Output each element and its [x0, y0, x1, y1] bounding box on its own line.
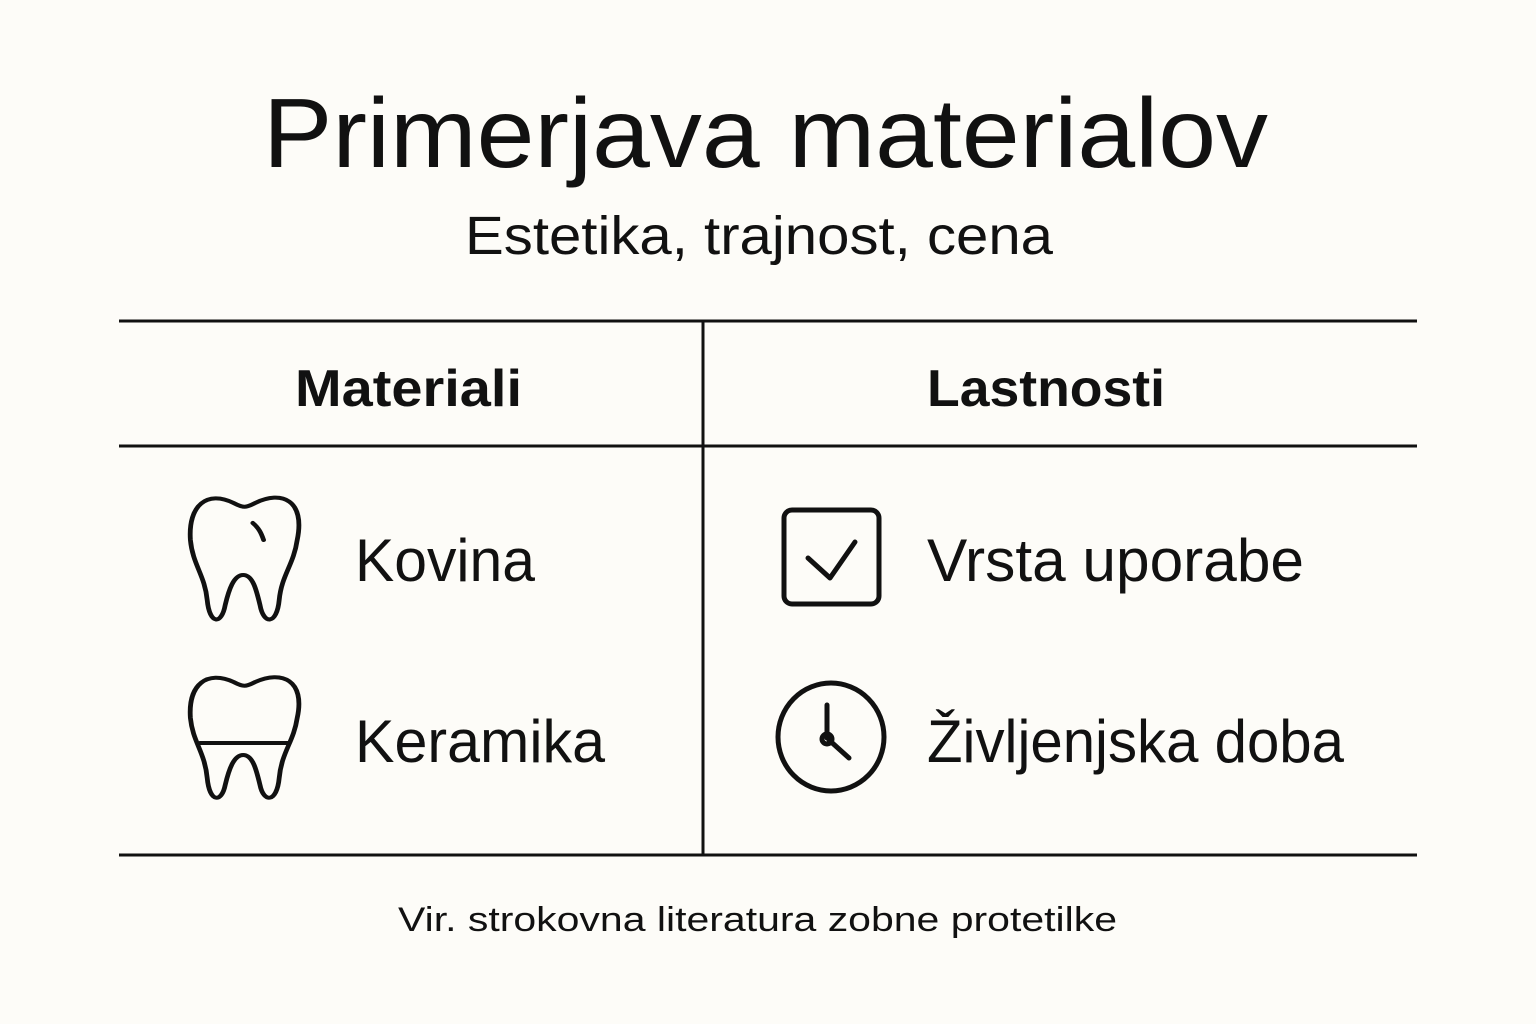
header: Lastnosti: Lastnosti	[927, 360, 1165, 418]
title: Primerjava materialov	[263, 78, 1268, 188]
text: Življenjska doba: Življenjska doba	[927, 708, 1345, 775]
text: Kovina: Kovina	[355, 527, 536, 594]
icon: checkbox	[784, 510, 879, 604]
header: Materiali: Materiali	[295, 360, 522, 418]
text: Keramika: Keramika	[355, 708, 606, 775]
footer: source: Vir. strokovna literatura zobne protetilke	[398, 901, 1117, 939]
icon: tooth (Keramika)	[190, 677, 299, 798]
icon: clock	[778, 683, 884, 791]
text: Vrsta uporabe: Vrsta uporabe	[927, 527, 1304, 594]
subtitle: Estetika, trajnost, cena	[465, 206, 1054, 266]
icon: tooth (Kovina)	[190, 498, 299, 619]
